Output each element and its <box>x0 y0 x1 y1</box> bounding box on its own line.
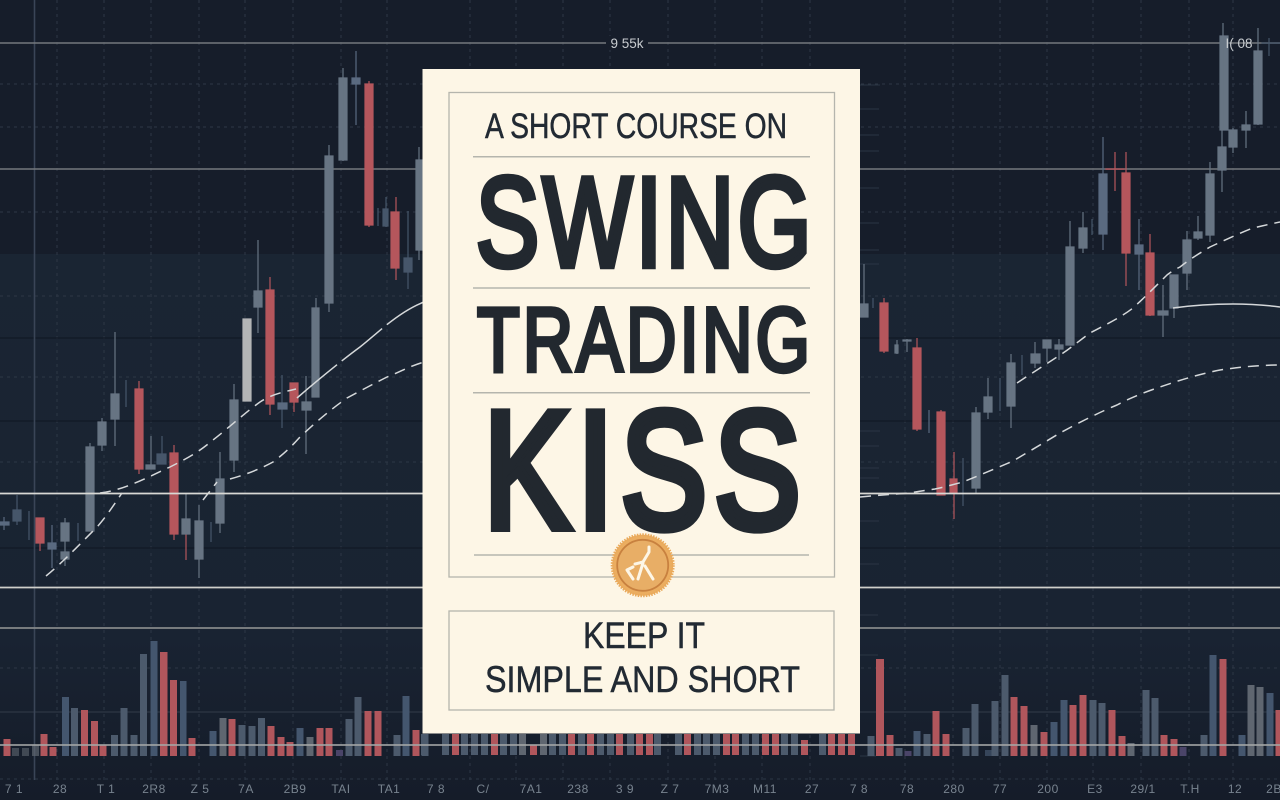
heading: kiss: KISS <box>484 378 808 563</box>
volume bars: right <box>868 655 1280 756</box>
volume bars: beneath card <box>421 734 855 755</box>
time axis labels: 27 <box>805 782 819 796</box>
price labels: I( 08 <box>1225 36 1253 51</box>
time axis labels: 12 <box>1228 782 1242 796</box>
price labels <box>606 36 1253 51</box>
time axis labels: 7 8 <box>850 782 868 796</box>
candlesticks: right side <box>860 23 1280 519</box>
time axis labels: 2B9 <box>284 782 306 796</box>
time axis labels: Z 5 <box>191 782 209 796</box>
price labels: 9 55k <box>610 36 644 51</box>
tagline: simple and short: SIMPLE AND SHORT <box>485 659 800 700</box>
time axis labels: 78 <box>900 782 914 796</box>
heading: swing: SWING <box>476 151 815 293</box>
time axis labels: 238 <box>567 782 589 796</box>
time axis labels: 7 1 <box>5 782 23 796</box>
tagline frame <box>449 611 834 710</box>
volume bars: left <box>4 641 428 756</box>
time axis labels: 28 <box>53 782 67 796</box>
inner title frame <box>449 92 834 577</box>
time axis labels: E3 <box>1087 782 1103 796</box>
time axis labels: M11 <box>753 782 777 796</box>
time axis labels <box>5 782 1280 796</box>
candlesticks: left side <box>0 51 424 578</box>
time axis labels: TAI <box>331 782 351 796</box>
time axis labels: 280 <box>943 782 965 796</box>
tagline: keep it: KEEP IT <box>583 614 705 656</box>
time axis labels: 7 8 <box>427 782 445 796</box>
lower price levels <box>0 494 1280 628</box>
time axis labels: T 1 <box>97 782 115 796</box>
time axis labels: 29/1 <box>1130 782 1156 796</box>
heading: a short course on: A SHORT COURSE ON <box>485 106 787 146</box>
time axis labels: 7A <box>238 782 254 796</box>
moving average lines <box>46 222 1280 576</box>
heading: trading: TRADING <box>477 290 813 391</box>
time axis labels: C/ <box>476 782 490 796</box>
upper price levels <box>0 43 1280 169</box>
time axis labels: 3 9 <box>616 782 634 796</box>
time axis labels: Z 7 <box>661 782 679 796</box>
title dividers <box>473 157 810 555</box>
time axis labels: 7M3 <box>705 782 729 796</box>
panel: title card <box>422 69 860 734</box>
time axis labels: TA1 <box>378 782 400 796</box>
icon: gold seal <box>612 535 673 596</box>
time axis labels: 2R8 <box>142 782 166 796</box>
time axis labels: T.H <box>1180 782 1200 796</box>
time axis labels: 7A1 <box>520 782 542 796</box>
volume baseline <box>0 744 1280 746</box>
time axis labels: 77 <box>993 782 1007 796</box>
time axis labels: 200 <box>1037 782 1059 796</box>
